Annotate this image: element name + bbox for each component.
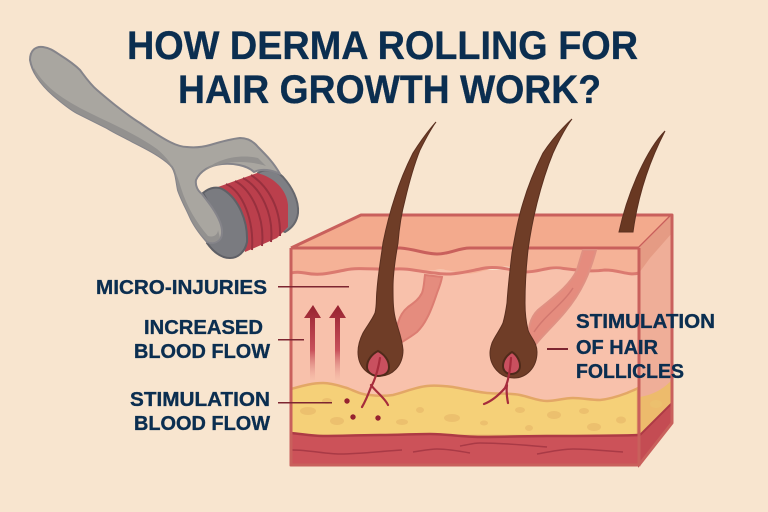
dermis bbox=[291, 270, 639, 465]
vessels bbox=[484, 358, 511, 404]
label: stimulation of hair follicles: STIMULATION bbox=[576, 311, 715, 333]
label: increased blood flow: BLOOD FLOW bbox=[134, 341, 270, 363]
papilla bbox=[503, 352, 520, 374]
icon: derma roller bbox=[30, 47, 298, 258]
roller right disc bbox=[258, 170, 298, 232]
handle shading bbox=[34, 68, 266, 242]
skin top face bbox=[291, 215, 672, 256]
label: increased blood flow bbox=[134, 317, 304, 363]
sebaceous gland left bbox=[397, 275, 442, 342]
label: stimulation blood flow: BLOOD FLOW bbox=[134, 413, 270, 435]
title bbox=[127, 24, 638, 112]
label: stimulation blood flow: STIMULATION bbox=[130, 389, 270, 411]
roller left disc bbox=[203, 188, 247, 258]
label: stimulation of hair follicles: OF HAIR bbox=[576, 337, 659, 359]
label: micro-injuries: MICRO-INJURIES bbox=[96, 277, 267, 299]
label: increased blood flow: INCREASED bbox=[144, 317, 263, 339]
vessels bbox=[362, 358, 388, 407]
fat layer bbox=[291, 383, 638, 436]
muscle fibres bbox=[292, 443, 623, 454]
epidermis bbox=[291, 248, 639, 274]
muscle side bbox=[639, 403, 672, 465]
roller red barrel bbox=[218, 173, 288, 252]
label: stimulation of hair follicles bbox=[547, 311, 715, 383]
skin block bbox=[291, 215, 672, 465]
label: stimulation of hair follicles: FOLLICLES bbox=[576, 361, 684, 383]
fat side bbox=[639, 380, 672, 436]
right side face bbox=[639, 215, 672, 465]
arrow: blood flow right bbox=[329, 305, 346, 380]
muscle layer bbox=[291, 433, 639, 465]
hair shaft and bulb bbox=[358, 122, 436, 376]
title: HAIR GROWTH WORK? bbox=[178, 68, 601, 112]
papilla bbox=[367, 351, 389, 376]
blood dots bbox=[344, 398, 381, 421]
sebaceous gland right bbox=[529, 250, 596, 344]
short hair bbox=[619, 131, 665, 232]
fat cells bbox=[300, 398, 662, 431]
title: HOW DERMA ROLLING FOR bbox=[127, 24, 638, 68]
label: stimulation blood flow bbox=[130, 389, 332, 435]
skin block outline bbox=[291, 215, 672, 465]
hair shaft and bulb bbox=[490, 119, 572, 378]
arrow: blood flow left bbox=[304, 305, 321, 380]
hair follicle right bbox=[484, 119, 572, 404]
roller handle and arm bbox=[30, 47, 280, 243]
hair follicle left bbox=[358, 122, 436, 407]
